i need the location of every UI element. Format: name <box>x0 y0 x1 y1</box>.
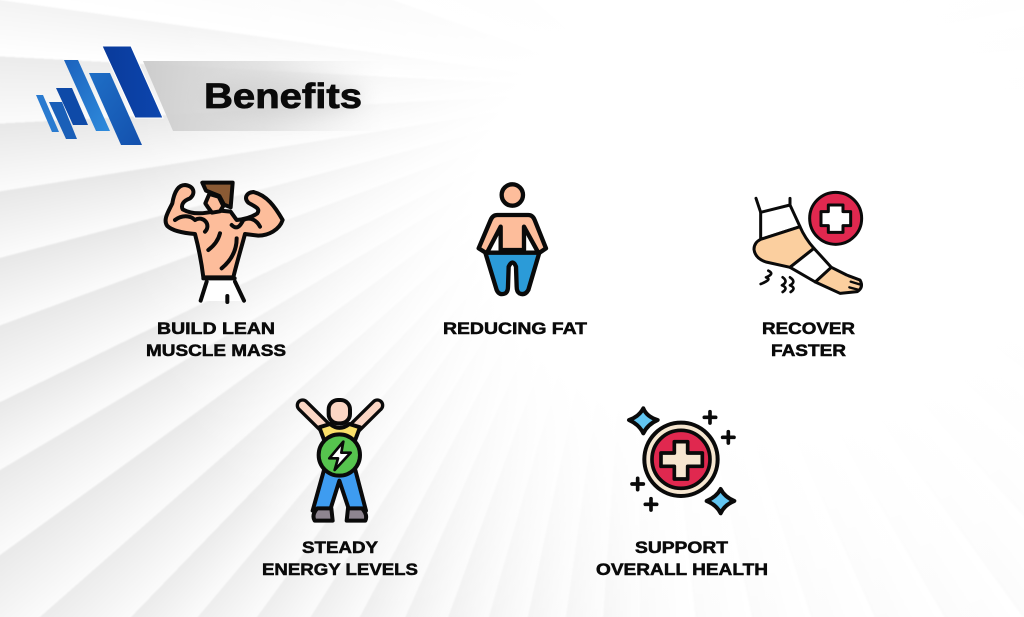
title: Benefits <box>204 77 362 116</box>
label: support overall health: OVERALL HEALTH <box>596 560 768 579</box>
label: build lean muscle mass: MUSCLE MASS <box>146 341 286 360</box>
icon: medical badge with sparkles <box>629 408 734 513</box>
label: steady energy levels: ENERGY LEVELS <box>262 560 418 579</box>
header ribbon <box>143 61 385 131</box>
label: steady energy levels <box>262 538 418 579</box>
label: reducing fat: REDUCING FAT <box>443 319 588 338</box>
icon: energetic person with lightning bolt <box>303 400 377 521</box>
label: build lean muscle mass <box>146 319 286 360</box>
label: steady energy levels: STEADY <box>302 538 379 557</box>
logo: blue slanted bars <box>36 46 163 145</box>
label: support overall health: SUPPORT <box>635 538 729 557</box>
label: recover faster <box>762 319 855 360</box>
icon: muscular man <box>166 183 283 302</box>
label: recover faster: FASTER <box>771 341 846 360</box>
label: recover faster: RECOVER <box>762 319 855 338</box>
label: support overall health <box>596 538 768 579</box>
icon: bandaged foot with medical cross <box>754 192 862 293</box>
icon: person with loose trousers <box>479 184 546 294</box>
label: build lean muscle mass: BUILD LEAN <box>157 319 275 338</box>
